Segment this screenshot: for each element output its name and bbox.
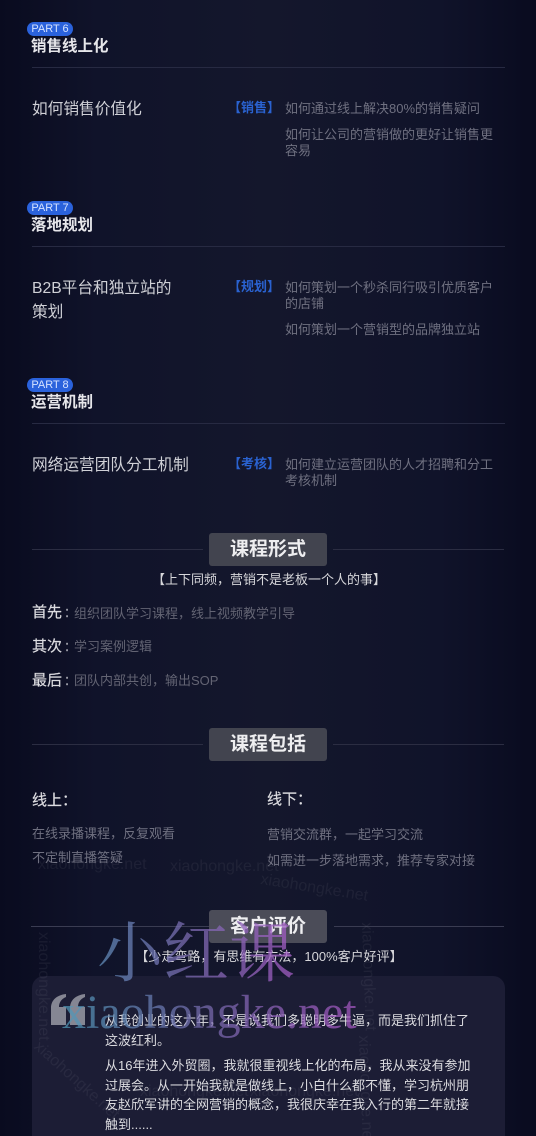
format text: first: 组织团队学习课程，线上视频教学引导 — [74, 606, 295, 621]
tag: sales: 【销售】 — [228, 100, 280, 115]
online heading: 线上： — [32, 792, 77, 809]
part 6 badge: PART 6 — [31, 23, 69, 35]
description: part 6 — [285, 101, 493, 158]
section badge: course includes: 课程包括 — [230, 734, 306, 755]
online list — [32, 826, 175, 865]
subtitle: testimonials: 【少走弯路，有思维有方法，100%客户好评】 — [135, 949, 403, 964]
offline list: 营销交流群，一起学习交流 — [267, 827, 423, 842]
topic: part 7 — [32, 279, 171, 321]
testimonial text: 触到...... — [105, 1117, 153, 1132]
watermark url: xiaohongke.net: xiaohongke.net — [62, 986, 357, 1039]
topic: part 8: 网络运营团队分工机制 — [32, 457, 189, 474]
description: part 6: 如何让公司的营销做的更好让销售更 — [285, 127, 493, 142]
format item: first: 首先: — [32, 604, 69, 621]
topic: part 6: 如何销售价值化 — [32, 101, 142, 118]
testimonial text: 从我创业的这六年，不是说我们多聪明多牛逼，而是我们抓住了 — [105, 1013, 469, 1028]
section badge: testimonials — [209, 910, 327, 943]
tag: assessment: 【考核】 — [228, 456, 280, 471]
part 6 badge — [27, 22, 73, 36]
online list: 不定制直播答疑 — [32, 850, 123, 865]
description: part 7: 如何策划一个秒杀同行吸引优质客户 — [285, 280, 493, 295]
description: part 8 — [285, 457, 493, 488]
section badge: course format — [209, 533, 327, 566]
watermark: faint repeated text: xiaohongke.net — [35, 932, 52, 1041]
format text: second: 学习案例逻辑 — [74, 639, 152, 654]
watermark: faint repeated text: xiaohongke.net — [140, 1083, 249, 1100]
watermark: faint repeated text — [31, 856, 379, 1136]
watermark: faint repeated text: xiaohongke.net — [38, 856, 147, 873]
watermark: faint repeated text: xiaohongke.net — [358, 922, 379, 1031]
description: part 8: 如何建立运营团队的人才招聘和分工 — [285, 457, 493, 472]
description: part 7: 如何策划一个营销型的品牌独立站 — [285, 322, 480, 337]
description: part 7: 的店铺 — [285, 296, 324, 311]
format item: last: 最后: — [32, 672, 69, 689]
section badge: course includes — [209, 728, 327, 761]
subtitle: course format: 【上下同频，营销不是老板一个人的事】 — [152, 572, 386, 587]
testimonial text — [105, 1013, 470, 1132]
heading: part 7: 落地规划 — [31, 217, 93, 234]
format item: second: 其次: — [32, 638, 69, 655]
description: part 7 — [285, 280, 493, 337]
topic: part 7: B2B平台和独立站的 — [32, 280, 171, 297]
format text: last: 团队内部共创，输出SOP — [74, 673, 218, 688]
watermark: faint repeated text: xiaohongke.net — [170, 858, 279, 875]
panel: testimonial — [32, 976, 505, 1136]
watermark: faint repeated text: xiaohongke.net — [250, 1083, 359, 1100]
heading: part 6: 销售线上化 — [31, 38, 109, 55]
topic: part 7: 策划 — [32, 304, 63, 321]
testimonial text: 友赵欣军讲的全网营销的概念，我很庆幸在我入行的第二年就接 — [105, 1097, 469, 1112]
testimonial text: 从16年进入外贸圈，我就很重视线上化的布局，我从来没有参加 — [105, 1058, 470, 1073]
description: part 6: 容易 — [285, 143, 311, 158]
tag: planning: 【规划】 — [228, 279, 280, 294]
testimonial text: 这波红利。 — [105, 1033, 170, 1048]
heading: part 8: 运营机制 — [31, 394, 93, 411]
section badge: testimonials: 客户评价 — [230, 916, 306, 937]
offline list — [267, 827, 475, 868]
part 7 badge — [27, 201, 73, 215]
part 8 badge — [27, 378, 73, 392]
watermark logo: 小红课: 小红课 — [97, 900, 295, 995]
offline list: 如需进一步落地需求，推荐专家对接 — [267, 853, 475, 868]
watermark: faint repeated text: xiaohongke.net — [31, 1038, 123, 1123]
watermark: faint repeated text: xiaohongke.net — [259, 871, 369, 905]
part 7 badge: PART 7 — [31, 202, 69, 214]
online list: 在线录播课程，反复观看 — [32, 826, 175, 841]
part 8 badge: PART 8 — [31, 379, 69, 391]
testimonial text: 过展会。从一开始我就是做线上，小白什么都不懂，学习杭州朋 — [105, 1078, 469, 1093]
description: part 6: 如何通过线上解决80%的销售疑问 — [285, 101, 480, 116]
offline heading: 线下： — [267, 791, 312, 808]
section badge: course format: 课程形式 — [230, 539, 306, 560]
description: part 8: 考核机制 — [285, 473, 337, 488]
icon: quote mark — [51, 994, 85, 1025]
